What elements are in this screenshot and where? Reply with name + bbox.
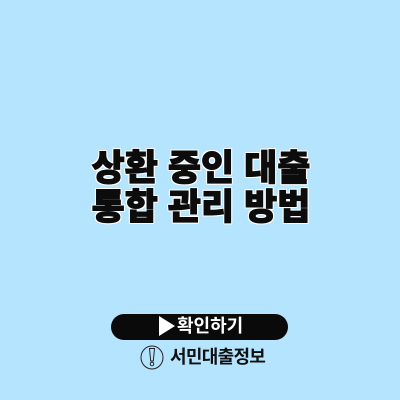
icon: exclamation mark [140,346,164,370]
button: confirm: 확인하기 [177,316,243,336]
button: confirm [111,314,288,340]
title [90,147,311,227]
brand name: 서민대출정보 [170,347,265,367]
title: 통합 관리 방법 [92,186,310,227]
title: 상환 중인 대출 [92,147,310,188]
